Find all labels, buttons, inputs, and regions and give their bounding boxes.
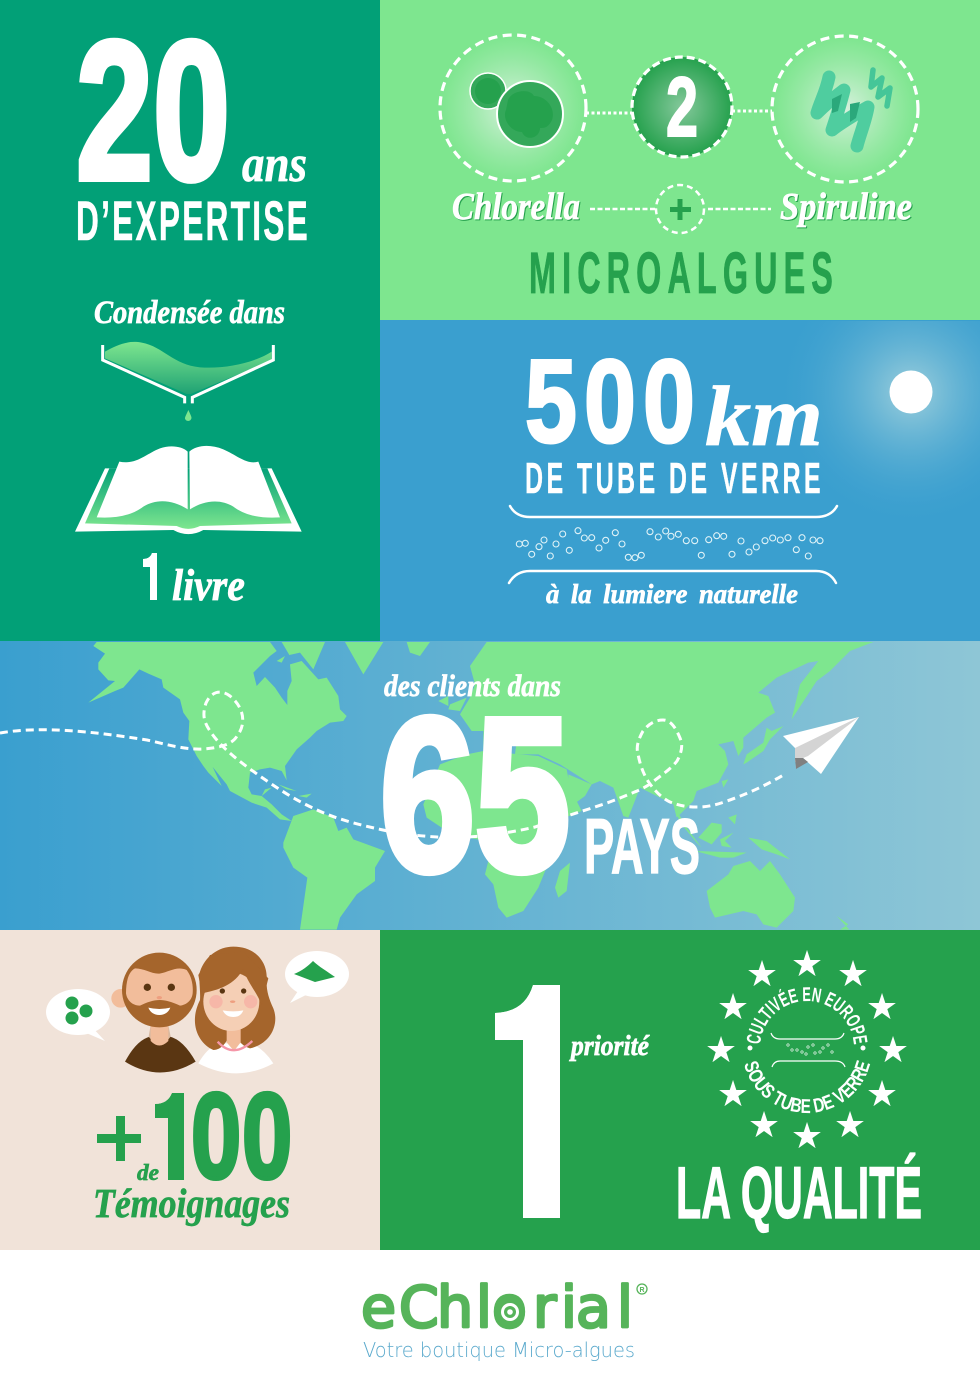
- stars: ★: [717, 987, 749, 1028]
- icon: open book: [75, 446, 302, 534]
- stars: ★: [791, 944, 823, 985]
- logo wordmark: eChlorial: [361, 1275, 633, 1341]
- text: 1 livre: [143, 553, 244, 601]
- map: americas: [88, 642, 385, 930]
- stars: ★: [866, 1074, 898, 1115]
- stars: ★: [837, 954, 869, 995]
- heading: 500 km: 500: [525, 336, 702, 468]
- text: à la lumiere naturelle: à la lumiere naturelle: [546, 579, 798, 609]
- map: eurasia, africa, oceania: [407, 642, 873, 930]
- text: +100: 1: [148, 1069, 198, 1207]
- icon: spirulina circle: [772, 36, 918, 182]
- text: 1 livre: livre: [172, 561, 245, 610]
- stars: ★: [717, 1074, 749, 1115]
- icon: funnel: [103, 342, 273, 421]
- text: ans: ans: [242, 136, 307, 193]
- illustration: man and woman: [111, 947, 275, 1073]
- heading: 65: 65: [380, 674, 570, 917]
- text: condensée dans: Condensée dans: [94, 295, 285, 331]
- connector lines: [586, 111, 772, 113]
- stars: [705, 944, 909, 1157]
- logo wordmark: R: [640, 1287, 645, 1294]
- text: d'expertise: D’EXPERTISE: [76, 189, 310, 252]
- speech bubble: powder: [285, 951, 349, 1003]
- text: +100: 00: [191, 1068, 293, 1204]
- circular text: [744, 987, 870, 1114]
- text: des clients dans: des clients dans: [384, 668, 561, 703]
- flight path: [0, 692, 785, 837]
- text: spiruline: Spiruline: [780, 186, 912, 228]
- woman: [195, 947, 275, 1073]
- circular text: SOUS TUBE DE VERRE: [744, 1060, 870, 1114]
- stars: ★: [746, 954, 778, 995]
- text: 1 livre: 1: [138, 536, 164, 616]
- circular text: CULTIVÉE EN EUROPE: [746, 987, 868, 1044]
- text: pays: PAYS: [584, 802, 700, 890]
- stars: ★: [705, 1030, 737, 1071]
- badge: cultivée en europe: [705, 944, 909, 1157]
- icon: number 2 circle: 2: [666, 60, 698, 154]
- stars: ★: [791, 1116, 823, 1157]
- man: [111, 953, 197, 1072]
- panel: world map 65 pays: [0, 641, 980, 930]
- stars: ★: [748, 1105, 780, 1146]
- panel: 500 km de tube de verre: [380, 320, 980, 641]
- heading: 500 km: km: [705, 368, 823, 464]
- heading: 1: 1: [459, 912, 609, 1290]
- icon: plus circle: [590, 185, 771, 233]
- heading: 1: [495, 985, 560, 1218]
- sun: [814, 321, 980, 488]
- icon: drop: [185, 410, 192, 421]
- text: priorité: priorité: [569, 1031, 650, 1062]
- icon: glass tube with bubbles: [509, 506, 837, 583]
- panel: 20 ans d'expertise: [0, 0, 381, 641]
- text: chlorella: Chlorella: [452, 186, 580, 228]
- icon: number 2 circle: [632, 57, 732, 157]
- heading: 20: 20: [76, 0, 230, 221]
- icon: paper plane: [783, 717, 859, 774]
- text: de: de: [137, 1160, 159, 1185]
- speech bubble: tablets: [46, 989, 110, 1041]
- stars: ★: [834, 1105, 866, 1146]
- panel: témoignages: [0, 930, 380, 1250]
- panel: 1 priorité la qualité: [380, 930, 980, 1250]
- stars: ★: [866, 987, 898, 1028]
- icon: chlorella circle: [440, 35, 586, 181]
- tagline: Votre boutique Micro-algues: [363, 1338, 635, 1362]
- text: témoignages: Témoignages: [93, 1180, 290, 1226]
- panel: 2 microalgues: [380, 0, 980, 321]
- text: +100: [97, 1090, 290, 1181]
- stars: ★: [877, 1030, 909, 1071]
- footer: logo: [0, 1250, 980, 1389]
